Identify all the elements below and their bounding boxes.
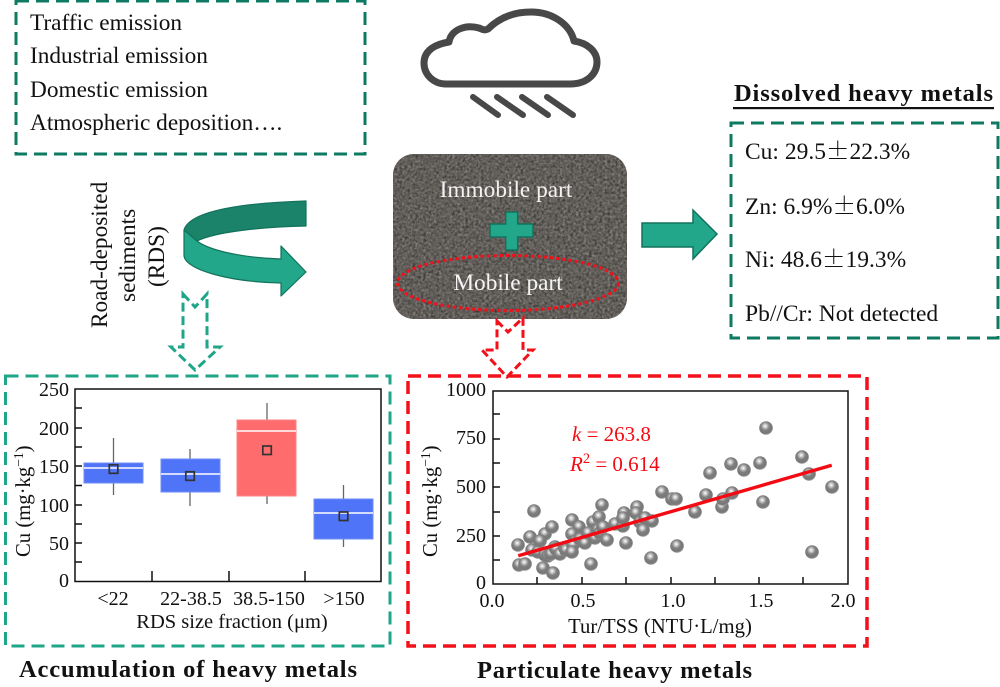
x axis tick labels [480,590,856,612]
panel: accumulation box plot [6,376,390,646]
y axis tick labels: 1000 [446,379,486,401]
label: immobile part: Immobile part [440,177,573,203]
box: over 150 [314,485,373,547]
x axis tick labels [97,588,365,610]
regression line [518,465,832,556]
value: lead and chromium: Pb//Cr: Not detected [745,301,938,327]
heading: accumulation of heavy metals: Accumulation of heavy metals [19,656,357,683]
y axis tick labels: 200 [39,418,69,440]
dotted ellipse: mobile part [398,256,618,310]
y axis tick labels: 250 [39,379,69,401]
y axis tick labels [446,379,486,594]
box: 38.5 to 150 [237,403,296,504]
label: road-deposited sediments [87,181,170,328]
arrow: dashed red down arrow [482,318,533,377]
y axis tick labels: 100 [39,495,69,517]
y axis title: ) [13,446,35,452]
panel: particulate scatter plot [408,376,867,646]
x axis tick labels: 0.5 [570,590,596,612]
x axis tick labels: 38.5-150 [233,588,305,610]
data points [511,421,839,580]
x axis tick labels: 2.0 [830,590,856,612]
value: copper: Cu: 29.5±22.3% [745,132,910,166]
x axis title: RDS size fraction (μm) [136,611,328,633]
y axis title: Cu (mg·kg [420,467,442,557]
annotation: r squared: = 0.614 [590,452,660,476]
y axis tick labels [39,379,69,592]
box: under 22 [84,438,143,495]
heading: dissolved heavy metals: Dissolved heavy metals [734,80,993,107]
x axis tick labels: 22-38.5 [160,588,222,610]
x axis tick labels: 0.0 [480,590,504,612]
x axis tick labels: 1.5 [748,590,774,612]
y axis tick labels: 0 [59,570,69,592]
y axis title: −1 [11,452,26,467]
scatter plot [418,379,856,638]
y axis tick labels: 750 [456,427,486,449]
axes frame [75,389,381,582]
icon: rain cloud [424,12,597,115]
y axis tick labels: 0 [476,572,486,594]
value: nickel: Ni: 48.6±19.3% [745,240,906,274]
y axis title: ) [420,446,442,452]
box: 22 to 38.5 [161,449,220,506]
y axis tick labels: 50 [49,533,69,555]
source: traffic emission: Traffic emission [30,10,182,36]
icon: green plus [490,212,533,250]
arrow: green right arrow [642,210,717,259]
panel: pollution sources [16,1,365,154]
label: mobile part: Mobile part [453,270,563,296]
value: zinc: Zn: 6.9%±6.0% [745,187,905,221]
y axis tick labels: 150 [39,456,69,478]
heading: particulate heavy metals: Particulate heavy metals [477,657,752,684]
x axis tick labels: <22 [97,588,129,610]
axes frame [493,391,848,584]
y axis title: Cu (mg·kg [13,467,35,557]
arrow: dashed green down arrow [171,294,220,370]
panel: road surface [393,154,627,319]
annotation: r squared: 2 [583,451,590,467]
source: atmospheric deposition: Atmospheric deposition…. [30,110,282,136]
panel: dissolved heavy metals [731,123,998,338]
label: road-deposited sediments: Road-deposited [87,181,113,328]
annotation: r squared: R [569,452,583,476]
x axis tick labels: >150 [323,588,365,610]
label: road-deposited sediments: (RDS) [144,226,170,287]
x axis title: Tur/TSS (NTU·L/mg) [568,616,752,638]
y axis title: −1 [418,452,433,467]
label: road-deposited sediments: sediments [115,209,141,302]
box plot [11,379,381,633]
source: industrial emission: Industrial emission [30,43,208,69]
y axis tick labels: 250 [456,525,486,547]
x axis tick labels: 1.0 [660,590,686,612]
icon: curved green arrow [184,201,306,296]
source: domestic emission: Domestic emission [30,77,208,103]
y axis tick labels: 500 [456,476,486,498]
annotation: slope: k = 263.8 [572,422,651,446]
